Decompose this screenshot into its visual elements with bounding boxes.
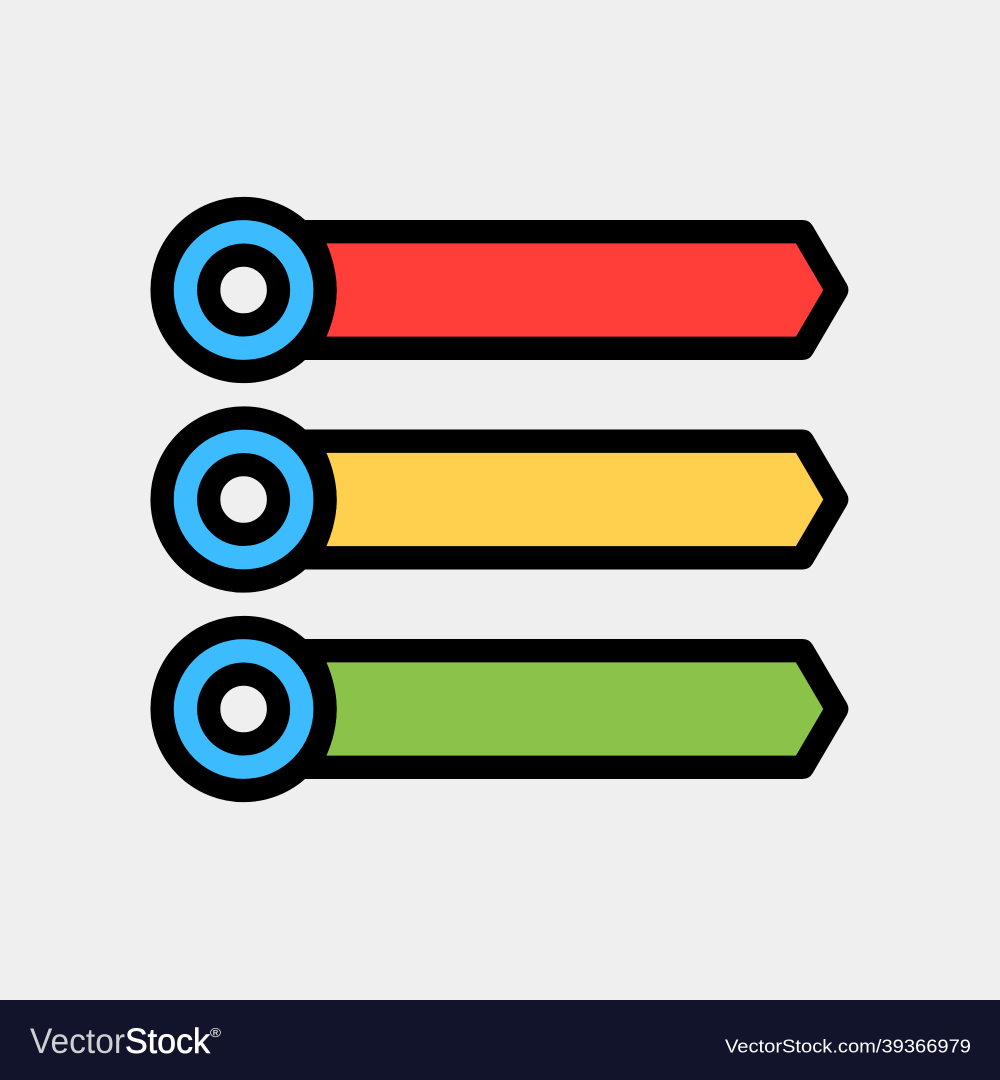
list row 3: green arrow banner (162, 628, 837, 790)
footer logo wordmark: Vector (30, 1022, 125, 1061)
icon: blue ring bullet 3 (162, 628, 337, 790)
footer image id: VectorStock.com/39366979 (725, 1036, 971, 1057)
icon: blue ring bullet 1 (162, 208, 337, 372)
green arrow bar (243, 651, 837, 767)
icon: blue ring bullet 2 (162, 418, 337, 581)
list row 2: yellow arrow banner (162, 418, 837, 581)
yellow arrow bar (243, 441, 837, 558)
footer logo wordmark: ® (210, 1025, 221, 1040)
footer logo wordmark (30, 1022, 221, 1061)
footer logo wordmark: Stock (125, 1022, 210, 1061)
red arrow bar (243, 232, 837, 348)
footer bar (0, 1000, 1000, 1080)
list row 1: red arrow banner (162, 208, 837, 372)
